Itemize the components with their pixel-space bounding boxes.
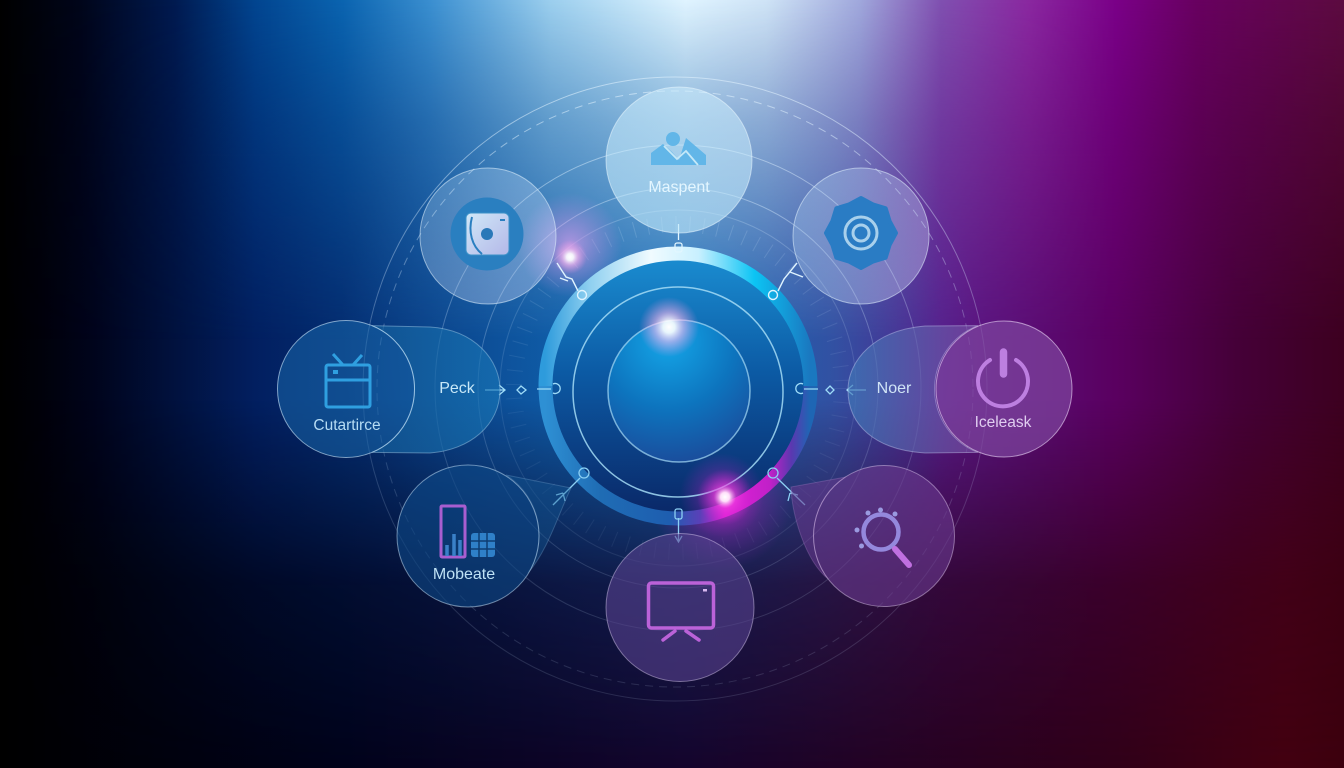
icon: seal: [826, 198, 896, 268]
cone: search: [791, 477, 846, 579]
glow top: [639, 297, 699, 357]
circle: Cutartirce: [278, 320, 414, 458]
node: monitor: [606, 534, 754, 682]
label: Cutartirce: Cutartirce: [313, 417, 381, 434]
capsule: Noer: [848, 326, 978, 453]
central dial: [518, 193, 810, 570]
node: search: [791, 466, 954, 606]
node: Mobeate: [397, 465, 571, 607]
connector: lower diagonals: [553, 468, 805, 505]
label: Peck: Peck: [439, 380, 476, 397]
connector: left: [485, 383, 560, 395]
icon: landscape: [651, 132, 706, 165]
icon: magnifier: [854, 508, 909, 565]
orbit rings: [363, 77, 987, 701]
cone: Mobeate: [506, 475, 571, 573]
icon: power: [978, 352, 1028, 406]
node: Cutartirce: [278, 320, 500, 458]
node: Maspent: [606, 87, 752, 233]
glow bottom: [697, 469, 753, 525]
icon: tv: [326, 354, 370, 407]
label: Noer: Noer: [877, 380, 912, 397]
connector: top: [675, 224, 682, 252]
capsule: Peck: [372, 326, 500, 453]
inner ring line: [573, 287, 783, 497]
label: Iceleask: Iceleask: [975, 414, 1032, 431]
circle: Mobeate: [397, 465, 539, 607]
icon: disc card: [450, 198, 524, 270]
glow upper left: [553, 240, 587, 274]
icon: monitor: [648, 583, 714, 640]
circle: search: [814, 466, 954, 606]
label: Mobeate: Mobeate: [433, 566, 495, 583]
ring lower half: [546, 386, 810, 518]
node: Iceleask: [848, 321, 1072, 457]
core sphere: [608, 320, 750, 462]
label: Maspent: Maspent: [648, 179, 710, 196]
ring upper half: [546, 254, 810, 386]
connector: bottom: [675, 509, 682, 542]
node: top right seal: [793, 168, 929, 304]
node: top left disc: [420, 168, 556, 304]
circle: Iceleask: [936, 321, 1072, 457]
connector: right: [796, 383, 866, 395]
icon: phone and grid: [441, 506, 495, 557]
connector: upper diagonals: [557, 263, 803, 300]
